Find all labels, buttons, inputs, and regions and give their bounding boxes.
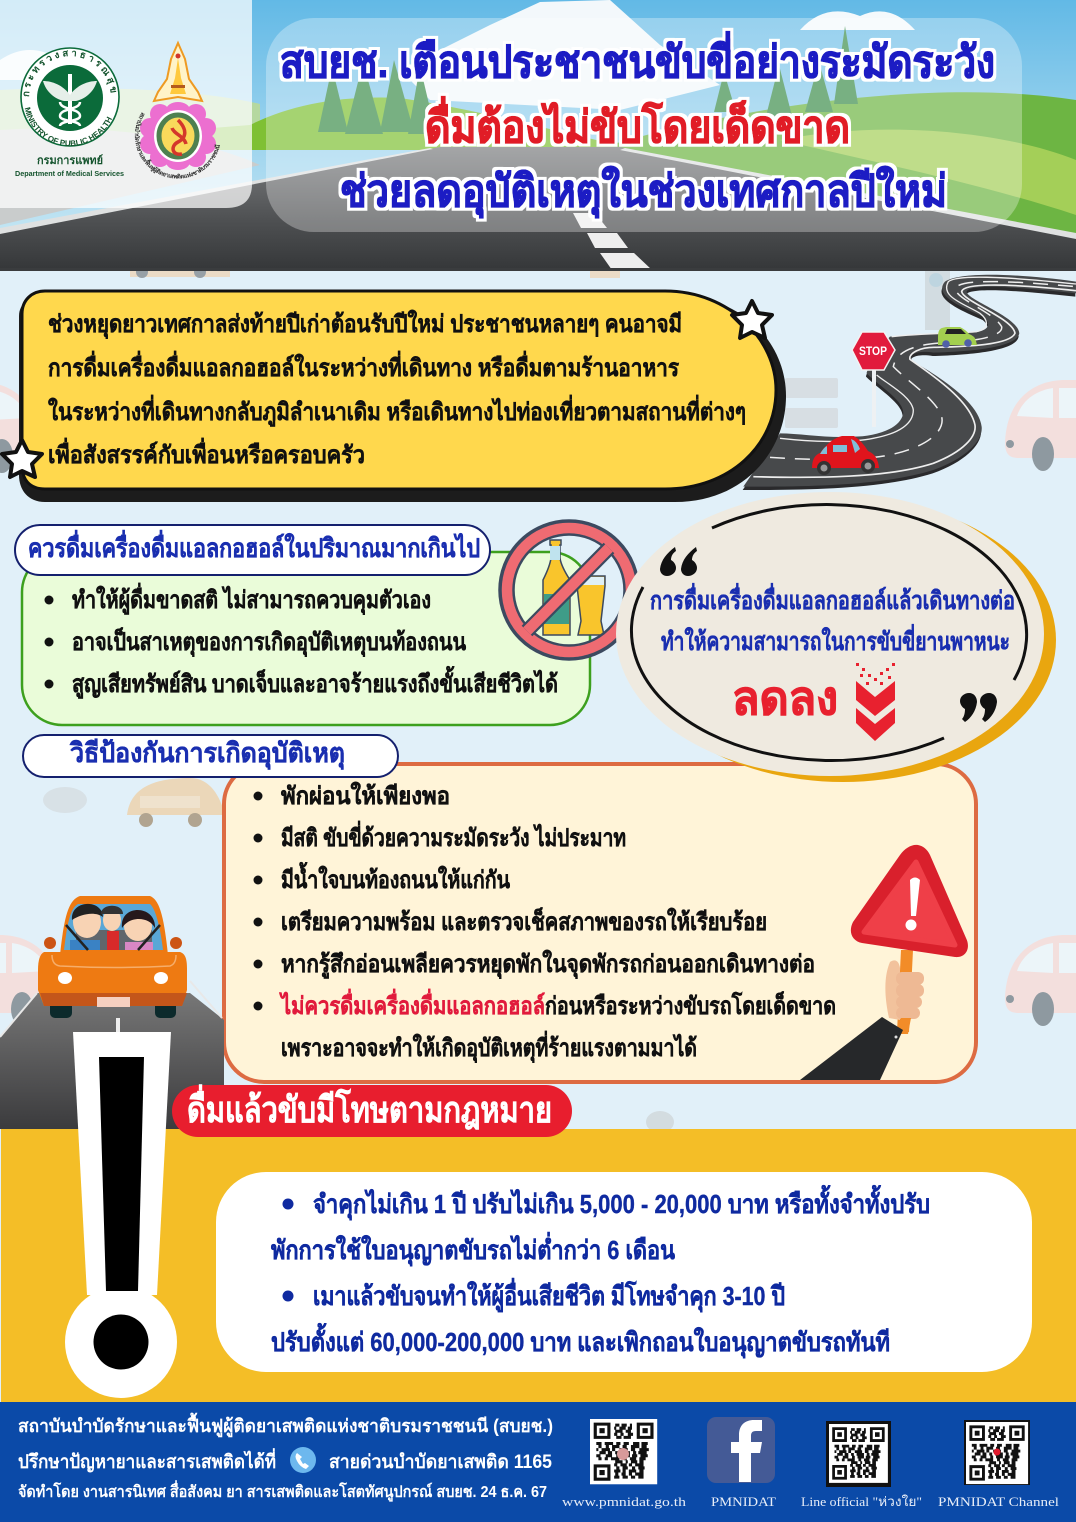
effects list: อาจเป็นสาเหตุของการเกิดอุบัติเหตุบนท้องถนน (72, 627, 466, 658)
icon: closing quote mark (960, 693, 997, 722)
panel: quote bubble (616, 492, 1056, 782)
penalties text: พักการใช้ใบอนุญาตขับรถไม่ต่ำกว่า 6 เดือน (271, 1231, 675, 1267)
footer captions: Line official "ห่วงใย" (801, 1494, 922, 1509)
footer text: ปรึกษาปัญหายาและสารเสพติดได้ที่ (18, 1448, 276, 1473)
prevention list: ก่อนหรือระหว่างขับรถโดยเด็ดขาด (545, 991, 836, 1020)
QR: YouTube channel (964, 1420, 1030, 1485)
department name: กรมการแพทย์ (37, 154, 103, 167)
icon: Ministry of Public Health seal (20, 47, 120, 147)
footer captions: PMNIDAT (711, 1494, 776, 1509)
department name: Department of Medical Services (15, 171, 124, 178)
prevention list: มีสติ ขับขี่ด้วยความระมัดระวัง ไม่ประมาท (281, 820, 626, 852)
illustration: winding road with cars and stop sign (743, 275, 1076, 490)
icon: Facebook (707, 1417, 775, 1483)
panel: legal penalties band (1, 1129, 1076, 1403)
quote text (650, 583, 1015, 724)
effects list: ทำให้ผู้ดื่มขาดสติ ไม่สามารถควบคุมตัวเอง (72, 582, 431, 616)
footer text: สถาบันบำบัดรักษาและฟื้นฟูผู้ติดยาเสพติดแห่งชาติบรมราชชนนี (สบยช.) (18, 1412, 553, 1438)
penalties text: ปรับตั้งแต่ 60,000-200,000 บาท และเพิกถอนใบอนุญาตขับรถทันที (271, 1322, 890, 1359)
prevention list: เตรียมความพร้อม และตรวจเช็คสภาพของรถให้เรียบร้อย (281, 907, 767, 936)
title line 3: ช่วยลดอุบัติเหตุในช่วงเทศกาลปีใหม่ (340, 165, 947, 219)
icon: institute emblem (134, 40, 220, 179)
icon: Ministry of Public Health seal: กระทรวงสาธารณสุข (24, 50, 116, 96)
prevention list: มีน้ำใจบนท้องถนนให้แก่กัน (281, 861, 510, 894)
title line 1: สบยช. เตือนประชาชนขับขี่อย่างระมัดระวัง (280, 31, 995, 87)
icon: double down chevron (856, 663, 895, 741)
icon: red car (812, 436, 879, 475)
icon: stop sign: STOP (859, 344, 887, 358)
footer text: สายด่วนบำบัดยาเสพติด 1165 (329, 1452, 552, 1473)
penalties heading pill (172, 1084, 572, 1137)
penalties card (216, 1172, 1032, 1372)
logo panel (0, 0, 252, 208)
icon: phone (290, 1447, 316, 1473)
effects list: สูญเสียทรัพย์สิน บาดเจ็บและอาจร้ายแรงถึงขั้นเสียชีวิตได้ (72, 665, 558, 699)
panel: prevention tips (23, 735, 976, 1082)
icon: star right (732, 301, 772, 338)
faded background pattern of cars and road signs (0, 266, 1076, 1133)
penalties text: จำคุกไม่เกิน 1 ปี ปรับไม่เกิน 5,000 - 20,000 บาท หรือทั้งจำทั้งปรับ (313, 1184, 930, 1221)
footer captions (562, 1494, 1059, 1509)
penalties text: เมาแล้วขับจนทำให้ผู้อื่นเสียชีวิต มีโทษจำคุก 3-10 ปี (313, 1277, 785, 1313)
intro text: การดื่มเครื่องดื่มแอลกอฮอล์ในระหว่างที่เดินทาง หรือดื่มตามร้านอาหาร (48, 350, 679, 382)
illustration: road below family car (0, 981, 224, 1129)
prevention heading pill (23, 735, 398, 777)
footer text: จัดทำโดย งานสารนิเทศ สื่อสังคม ยา สารเสพติดและโสตทัศนูปกรณ์ สบยช. 24 ธ.ค. 67 (18, 1480, 547, 1503)
icon: Ministry of Public Health seal: MINISTRY OF PUBLIC HEALTH (24, 107, 112, 146)
panel: effects of excessive drinking (15, 525, 590, 725)
prevention list: เพราะอาจจะทำให้เกิดอุบัติเหตุที่ร้ายแรงตามมาได้ (281, 1030, 697, 1064)
quote text: ลดลง (732, 672, 838, 724)
icon: hand holding warning sign (800, 845, 968, 1080)
footer captions: www.pmnidat.go.th (562, 1494, 687, 1509)
icon: opening quote mark (660, 547, 697, 576)
prevention list: พักผ่อนให้เพียงพอ (281, 781, 450, 810)
intro panel (2, 291, 786, 502)
title panel (266, 18, 1022, 232)
department name (15, 154, 124, 178)
QR: website (590, 1419, 657, 1484)
effects heading pill (15, 525, 490, 575)
icon: star left (2, 440, 42, 477)
intro text (48, 309, 746, 469)
penalties heading pill: ดื่มแล้วขับมีโทษตามกฎหมาย (187, 1084, 552, 1130)
footer (0, 1402, 1076, 1522)
effects heading pill: ควรดื่มเครื่องดื่มแอลกอฮอล์ในปริมาณมากเกินไป (28, 529, 480, 563)
icon: family in orange car (38, 896, 187, 1018)
prevention list: หากรู้สึกอ่อนเพลียควรหยุดพักในจุดพักรถก่อนออกเดินทางต่อ (281, 949, 815, 980)
footer text (18, 1412, 553, 1503)
icon: giant exclamation mark (65, 1032, 177, 1398)
intro text: ในระหว่างที่เดินทางกลับภูมิลำเนาเดิม หรือเดินทางไปท่องเที่ยวตามสถานที่ต่างๆ (48, 394, 746, 427)
intro text: เพื่อสังสรรค์กับเพื่อนหรือครอบครัว (48, 437, 365, 469)
icon: stop sign (852, 332, 895, 427)
icon: no alcohol sign (500, 521, 638, 659)
prevention list: ไม่ควรดื่มเครื่องดื่มแอลกอฮอล์ (278, 988, 545, 1020)
intro text: ช่วงหยุดยาวเทศกาลส่งท้ายปีเก่าต้อนรับปีใหม่ ประชาชนหลายๆ คนอาจมี (48, 309, 682, 340)
effects list (44, 582, 558, 699)
prevention heading pill: วิธีป้องกันการเกิดอุบัติเหตุ (69, 738, 345, 770)
penalties text (271, 1184, 930, 1359)
icon: green car (938, 327, 977, 348)
footer captions: PMNIDAT Channel (938, 1494, 1059, 1509)
header scene: sky, hills and road (0, 0, 1076, 271)
QR: Line official (826, 1421, 891, 1487)
prevention list (254, 781, 836, 1064)
title line 2: ดื่มต้องไม่ขับโดยเด็ดขาด (425, 96, 850, 152)
icon: institute emblem: สถาบันบำบัดรักษาและฟื้นฟูผู้ติดยาเสพติดแห่งชาติบรมราชชนนี (134, 112, 220, 179)
